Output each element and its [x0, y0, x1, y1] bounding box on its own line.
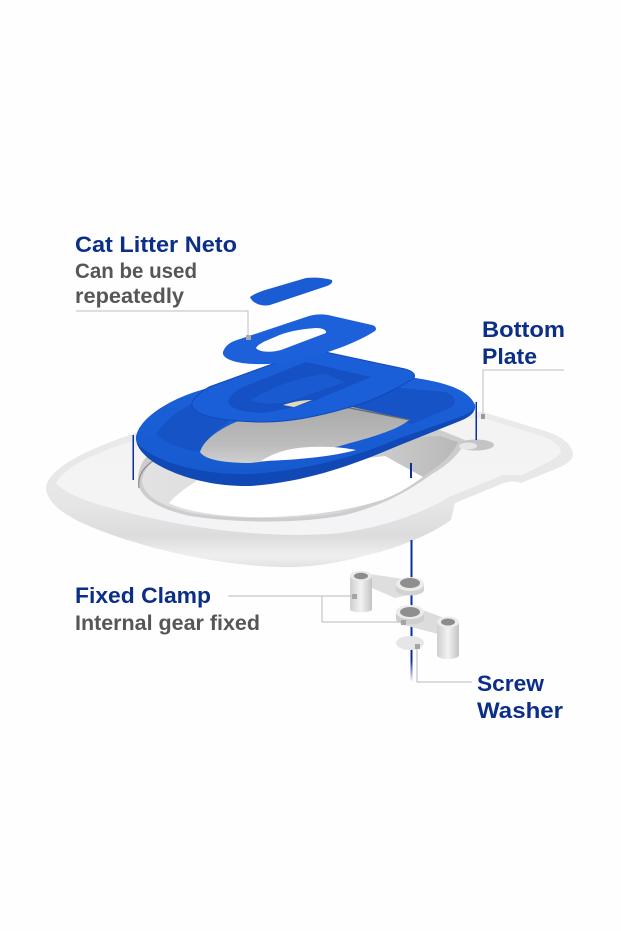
- tray opening gray: [200, 405, 409, 463]
- label: screw washer: [477, 671, 563, 723]
- plate opening: [169, 456, 423, 517]
- callout line: screw washer: [415, 644, 472, 682]
- screw washer part: [396, 636, 424, 650]
- label: cat litter neto: Can be used: [75, 260, 197, 283]
- label: bottom plate: Bottom: [482, 317, 565, 342]
- clamp right: [396, 605, 459, 659]
- plate hole well: [138, 425, 465, 522]
- label: bottom plate: Plate: [482, 344, 537, 369]
- blue top cover: [250, 278, 332, 306]
- label: fixed clamp: Fixed Clamp: [75, 583, 211, 608]
- label: fixed clamp: [75, 583, 260, 635]
- tray left basin: [156, 398, 250, 452]
- callout line: fixed clamp: [228, 594, 406, 625]
- blue tray: [136, 360, 475, 486]
- callout line: cat litter neto: [76, 311, 251, 340]
- tray outer shadow band: [136, 360, 475, 486]
- label: bottom plate: [482, 317, 565, 369]
- clamp left: [350, 571, 424, 612]
- label: screw washer: Screw: [477, 671, 545, 696]
- blue lid ring: [223, 314, 376, 364]
- label: cat litter neto: Cat Litter Neto: [75, 232, 237, 257]
- tray right basin: [350, 386, 455, 424]
- blue seat ring: [192, 352, 415, 422]
- dark arc at well edge: [139, 458, 158, 488]
- tray top rim: [136, 360, 475, 474]
- plate mounting boss: [458, 440, 494, 450]
- label: screw washer: Washer: [477, 698, 563, 723]
- dark seam: [340, 406, 410, 420]
- bottom plate: [46, 412, 573, 567]
- label: cat litter neto: repeatedly: [75, 285, 184, 308]
- callout line: bottom plate: [481, 370, 564, 419]
- label: fixed clamp: Internal gear fixed: [75, 612, 260, 635]
- white through hole: [261, 447, 356, 461]
- assembly guide lines: [132, 402, 477, 682]
- label: cat litter neto: [75, 232, 237, 308]
